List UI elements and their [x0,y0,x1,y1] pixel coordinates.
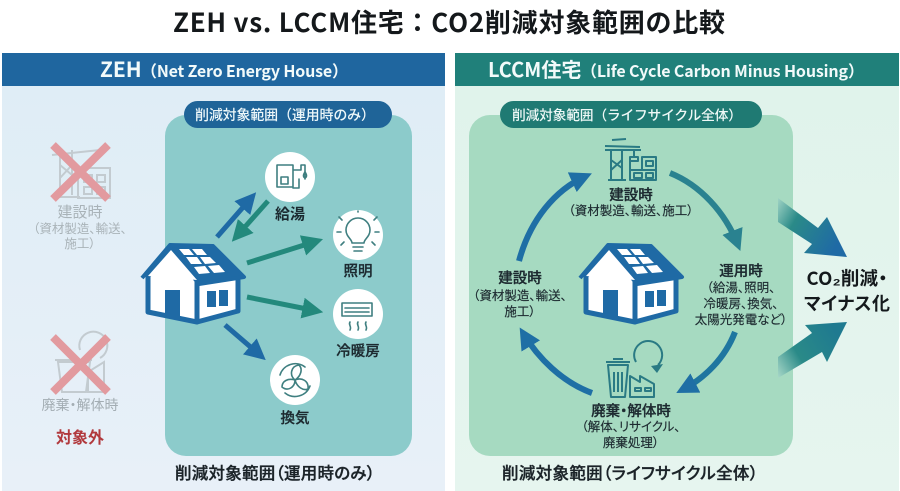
stage: demolition: 廃棄・解体時 [591,402,671,420]
LCCM header: LCCM住宅 [488,54,581,83]
item: lighting [333,210,383,280]
ZEH header: （Net Zero Energy House） [141,58,348,82]
excluded: construction: （資材製造、輸送、 [33,221,127,236]
title: ZEH vs. LCCM住宅：CO2削減対象範囲の比較 [173,3,725,40]
icon: house with solar panels [580,245,682,322]
stage: construction (left): 施工） [504,305,536,319]
arrow: construction to operation [670,173,738,245]
icon: crossed-out crane [52,145,110,199]
scope pill: whole life cycle [500,101,762,128]
arrow: house to air conditioning [247,297,317,311]
caption: operation only: 削減対象範囲（運用時のみ） [175,463,375,483]
scope pill: operation only: 削減対象範囲（運用時のみ） [195,107,375,123]
stage: demolition [581,341,681,450]
stage: operation: 冷暖房、換気、 [703,296,779,311]
arrow: demolition to construction [519,176,586,261]
arrow: to CO2 reduction (lower) [778,322,847,378]
arrow: house to hot water [217,197,252,237]
arrow: hot water to house [236,201,268,237]
excluded: construction [33,145,127,251]
excluded: demolition: 廃棄・解体時 [42,397,118,413]
item: ventilation [270,355,320,427]
stage: construction: （資材製造、輸送、施工） [568,203,694,218]
item: lighting: 照明 [344,263,372,280]
item: air conditioning: 冷暖房 [336,343,380,360]
excluded: construction: 施工） [64,237,96,251]
stage: operation [695,263,787,327]
stage: operation: （給湯、照明、 [707,281,775,295]
panel: LCCM [455,53,899,491]
item: ventilation: 換気 [280,409,310,427]
stage: construction: 建設時 [609,187,653,204]
arrow: disposal back to construction label [523,333,592,393]
arrow: house to lighting [247,241,317,263]
outcome: CO2 reduction and minus: マイナス化 [804,290,890,316]
scope box: operation only [165,115,412,456]
stage: construction [568,139,694,218]
stage: construction (left): （資材製造、輸送、 [473,288,567,303]
excluded: construction: 建設時 [57,204,103,221]
scope pill: whole life cycle: 削減対象範囲（ライフサイクル全体） [512,107,742,123]
stage: demolition: （解体、リサイクル、 [581,420,681,434]
icon: crossed-out demolition [53,332,108,392]
stage: operation: 運用時 [719,263,763,280]
scope box: whole life cycle [469,115,793,456]
stage: construction (left) [473,270,567,319]
LCCM header: （Life Cycle Carbon Minus Housing） [581,58,864,82]
ZEH header [2,53,445,86]
icon: house with solar panels [142,245,244,322]
excluded: demolition [42,332,118,447]
LCCM header [455,53,899,86]
item: hot water: 給湯 [275,206,305,223]
outcome: CO2 reduction and minus: CO₂削減・ [806,265,888,291]
scope pill: operation only [184,101,392,128]
outcome: CO2 reduction and minus [804,265,890,316]
arrow: house to ventilation [225,325,261,356]
excluded label: 対象外 [56,428,104,447]
stage: construction (left): 建設時 [498,270,542,287]
arrow: operation to demolition [682,332,735,390]
stage: operation: 太陽光発電など） [695,312,787,327]
caption: whole life cycle: 削減対象範囲（ライフサイクル全体） [502,463,758,483]
panel: ZEH [2,53,445,491]
icon: bin, factory and recycle [606,341,663,397]
ZEH header: ZEH [100,54,142,84]
arrow: to CO2 reduction (upper) [778,198,847,257]
stage: demolition: 廃棄処理） [603,436,659,450]
item: air conditioning [333,289,383,360]
item: hot water [265,152,315,223]
icon: crane and blocks [605,139,656,180]
